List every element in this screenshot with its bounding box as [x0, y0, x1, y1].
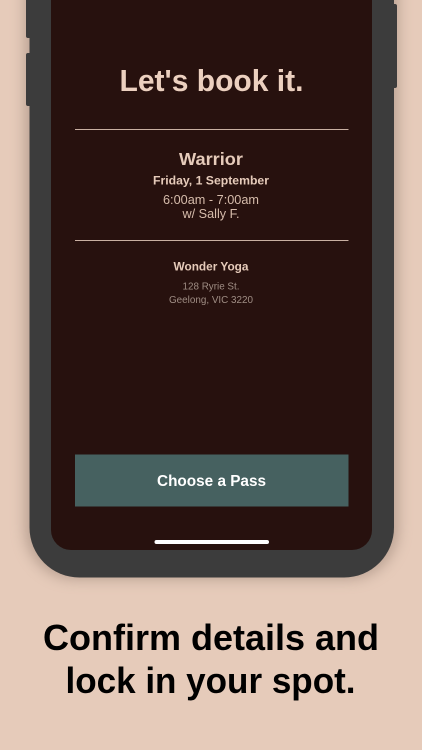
phone mockup — [26, 0, 397, 578]
choose a pass button — [75, 454, 348, 506]
phone shadow — [25, 0, 398, 579]
class time: 6:00am - 7:00am — [163, 192, 259, 207]
home indicator — [154, 540, 269, 544]
class details — [153, 149, 269, 221]
class date: Friday, 1 September — [153, 174, 269, 188]
caption: lock in your spot. — [66, 660, 356, 701]
phone side buttons — [26, 0, 397, 106]
studio street: 128 Ryrie St. — [182, 282, 240, 292]
caption: Confirm details and — [43, 617, 379, 658]
phone body — [30, 0, 394, 578]
class name: Warrior — [179, 149, 243, 169]
class instructor: w/ Sally F. — [182, 206, 240, 221]
studio name: Wonder Yoga — [174, 260, 249, 274]
studio city: Geelong, VIC 3220 — [169, 295, 253, 306]
phone screen — [51, 0, 372, 550]
choose a pass button: Choose a Pass — [157, 473, 266, 490]
screen heading: Let's book it. — [120, 63, 304, 98]
studio details — [169, 260, 253, 306]
caption — [43, 617, 379, 701]
